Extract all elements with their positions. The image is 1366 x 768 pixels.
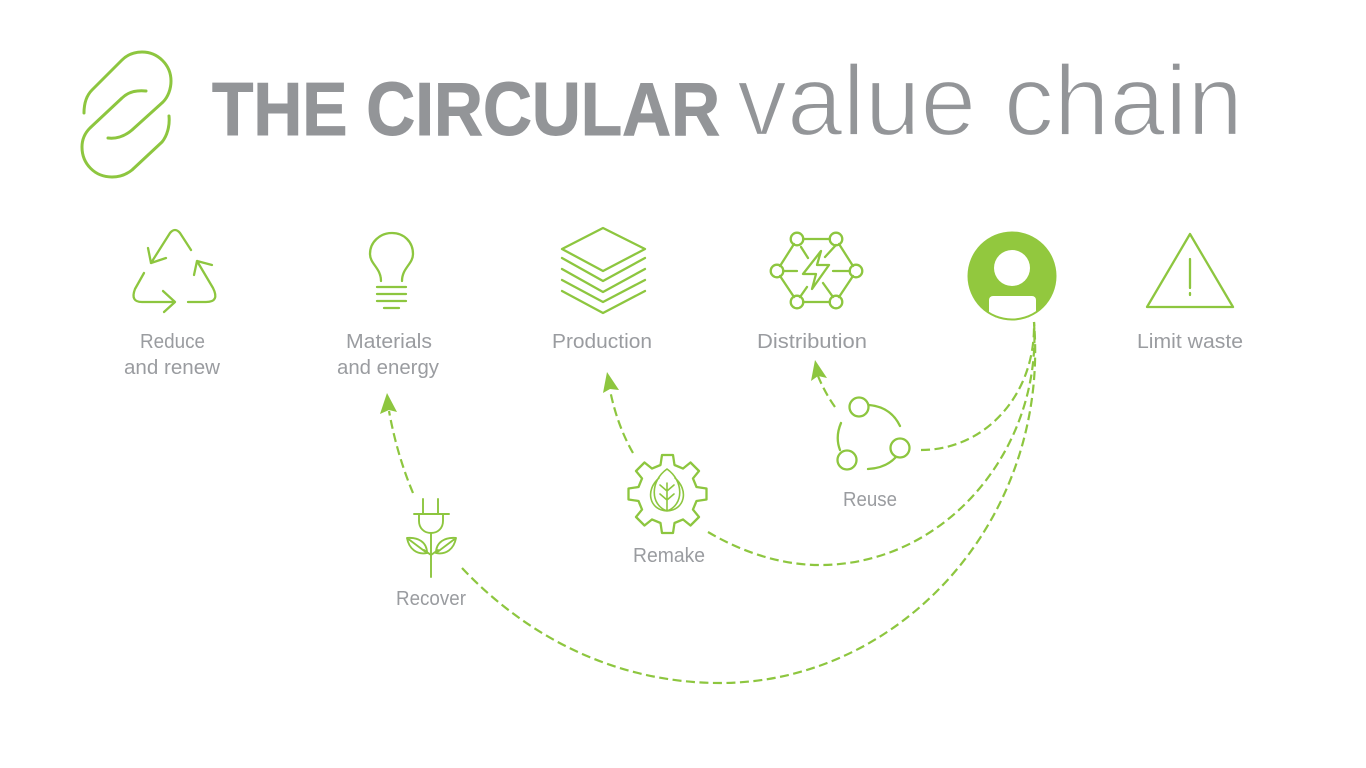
title: THE CIRCULAR (212, 67, 720, 151)
title: value chain (737, 45, 1243, 157)
icon: light bulb (370, 233, 413, 308)
label: production: Production (552, 331, 652, 353)
label: distribution: Distribution (757, 331, 867, 353)
arrow: remake to production (603, 372, 633, 453)
arrow: remake to consumer (708, 322, 1034, 565)
label: limit waste: Limit waste (1137, 331, 1243, 353)
label: materials and energy (337, 331, 439, 379)
label: reduce and renew: Reduce (140, 331, 205, 353)
title (212, 45, 1243, 157)
label: reuse: Reuse (843, 489, 897, 511)
icon: warning triangle (1147, 234, 1233, 307)
arrow: recover to materials (380, 393, 413, 493)
icon: stacked layers (562, 228, 645, 313)
arrow: reuse to distribution (811, 360, 835, 407)
icon: plug plant (407, 499, 456, 577)
label: reduce and renew (124, 331, 221, 379)
label: materials and energy: Materials (346, 331, 432, 353)
label: recover: Recover (396, 588, 466, 610)
label: remake: Remake (633, 545, 705, 567)
icon: reuse circular nodes (838, 398, 910, 470)
arrow: recover to consumer (462, 322, 1035, 683)
icon: gear with leaf (628, 455, 706, 533)
label: materials and energy: and energy (337, 357, 439, 379)
label: reduce and renew: and renew (124, 357, 221, 379)
arrow: reuse to consumer (921, 325, 1034, 450)
icon: recycle arrows (134, 230, 215, 312)
icon: chain link logo (82, 52, 171, 177)
icon: energy network (771, 233, 862, 308)
icon: consumer person (968, 232, 1056, 326)
